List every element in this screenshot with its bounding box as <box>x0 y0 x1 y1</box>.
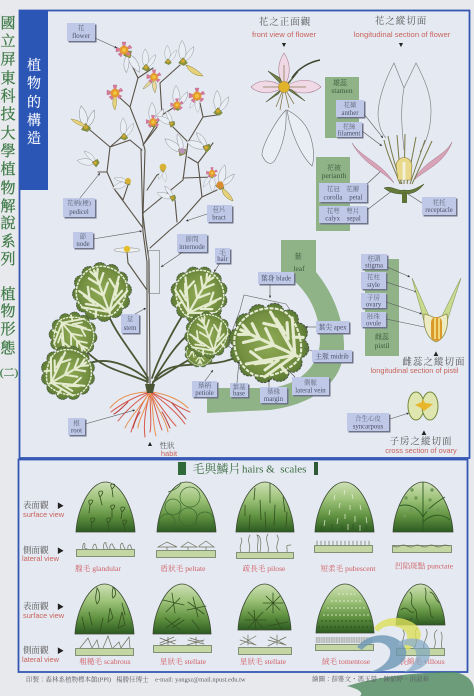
label: petiole <box>192 380 218 398</box>
side title: series name: 國 <box>0 15 16 32</box>
arrow: node <box>93 231 142 239</box>
label: base: 葉基 <box>232 382 246 391</box>
leaf background band <box>207 240 344 413</box>
side title: series name: 科 <box>0 88 16 105</box>
band heading: stamen: 雄蕊 <box>333 78 348 87</box>
arrow: margin <box>268 379 270 387</box>
heading: front view of flower: front view of flower <box>252 30 316 39</box>
title block: plant structure: 的 <box>27 95 41 111</box>
label: lateral vein <box>292 377 330 396</box>
heading: cross section of ovary <box>385 428 457 455</box>
side title: series name: 列 <box>0 251 16 268</box>
side title: series name: 大 <box>0 125 16 142</box>
label: syncarpous: syncarpous <box>353 424 384 430</box>
hair type: stellate <box>153 584 212 666</box>
band heading: stamen <box>331 78 353 95</box>
arrow: root <box>85 410 135 424</box>
title block: plant structure: 構 <box>27 112 41 129</box>
arrow: internode <box>161 252 183 267</box>
footer: print credit: 印製：森林系植物標本館(PPI) 楊勝任博士 e-mail: yangsz@mail.npust.edu.tw <box>26 674 246 684</box>
band heading: perianth: 花被 <box>327 163 341 172</box>
band heading: pistil: pistil <box>374 341 390 350</box>
hair type: villous: 長綿毛 villous <box>399 656 445 666</box>
row labels: surface and lateral views, row 2: lateral view <box>22 655 60 664</box>
label: anther: 花藥 <box>344 100 357 109</box>
band heading: leaf: leaf <box>293 264 305 273</box>
arrow: anther <box>364 114 383 138</box>
roots <box>110 392 190 437</box>
hair type: glandular <box>75 482 135 573</box>
label: root <box>68 418 86 436</box>
hair type: stellate: 星狀毛 stellate <box>160 656 207 666</box>
heading: habit: ▲ <box>147 441 153 448</box>
side title: series name: (二) <box>0 367 18 379</box>
label: filament <box>336 122 364 138</box>
label: internode: 節間 <box>186 234 199 243</box>
side title: series name: 東 <box>0 70 16 87</box>
label: lateral vein: lateral vein <box>295 388 326 394</box>
row labels: surface and lateral views, row 2: 側面觀 <box>23 645 49 655</box>
panel: plant structure <box>20 10 470 458</box>
line: lateral vein <box>286 368 295 377</box>
label: hair: hair <box>217 256 229 263</box>
label: node <box>73 232 94 250</box>
side title: series name: 植 <box>0 285 16 303</box>
hair type: pilose <box>236 482 294 573</box>
label: stigma: 柱頭 <box>368 254 381 262</box>
plant habit illustration <box>32 40 240 437</box>
arrow: stem <box>135 308 146 314</box>
label: stem: stem <box>124 325 137 332</box>
row labels: surface and lateral views, row 1: surface view <box>23 510 65 519</box>
label: pedicel: 花柄(梗) <box>67 198 91 207</box>
side title: series name: 態 <box>0 340 16 357</box>
label: filament: filament <box>338 130 360 138</box>
side title: series name: 解 <box>0 198 16 215</box>
label: hair <box>215 248 232 264</box>
row labels: surface and lateral views, row 2: ▶ <box>57 647 64 655</box>
label: corolla petal <box>319 183 368 204</box>
label: flower <box>67 23 96 42</box>
hair type: punctate <box>392 482 454 570</box>
arrow: hair <box>214 263 220 272</box>
label: apex: 葉尖 apex <box>318 322 347 332</box>
arrow: petal <box>367 170 382 184</box>
label: stem: 莖 <box>127 314 134 323</box>
label: base <box>230 382 250 398</box>
hair type: scabrous <box>75 584 134 666</box>
label: pedicel: pedicel <box>69 209 89 216</box>
panel: hairs and scales <box>18 460 468 672</box>
label: blade <box>258 272 296 286</box>
watermark logo <box>347 618 474 696</box>
heading: longitudinal section of flower: longitudinal section of flower <box>354 30 451 39</box>
heading: longitudinal section of flower: ▼ <box>398 42 404 49</box>
band heading: stamen: stamen <box>331 86 353 95</box>
label: anther <box>336 100 366 118</box>
row labels: surface and lateral views, row 1: lateral view <box>22 554 60 563</box>
side title: series name: 系 <box>0 233 16 250</box>
heading: front view of flower <box>252 16 316 49</box>
label: style: style <box>367 282 380 289</box>
arrow: syncarpous <box>390 413 409 419</box>
label: receptacle: 花托 <box>432 198 446 206</box>
heading: longitudinal section of flower: 花之縱切面 <box>375 15 427 27</box>
stamen background band <box>325 77 359 138</box>
label: filament: 花絲 <box>342 122 356 130</box>
label: bract: 苞片 <box>212 204 226 214</box>
arrow: stigma <box>387 267 410 277</box>
leaves <box>65 255 139 329</box>
side title: series name: 植 <box>0 160 16 178</box>
label: ovule: 胚珠 <box>367 312 380 320</box>
label: petiole: 葉柄 <box>198 380 212 390</box>
heading: front view of flower: 花之正面觀 <box>259 16 311 28</box>
label: style <box>361 272 388 290</box>
label: stigma: stigma <box>365 262 383 270</box>
illustration: longitudinal section of flower <box>352 63 452 203</box>
label: calyx sepal: calyx sepal <box>325 216 361 222</box>
side title: series name: 學 <box>0 143 16 160</box>
label: base: base <box>233 390 245 398</box>
title block: plant structure: 植 <box>27 57 41 74</box>
label: calyx sepal: 花萼 萼片 <box>327 206 359 215</box>
hair type: pubescent: 短柔毛 pubescent <box>320 563 376 573</box>
side title: series name: 屏 <box>0 51 16 68</box>
hair type: villous <box>396 584 445 666</box>
side title: series name: 說 <box>0 215 16 232</box>
petioles <box>85 310 240 385</box>
heading: hairs and scales <box>178 461 318 476</box>
hair type: scabrous: 粗糙毛 scabrous <box>79 656 131 666</box>
label: node: node <box>76 241 90 248</box>
arrow: blade <box>269 284 271 298</box>
label: stem <box>121 314 140 334</box>
row labels: surface and lateral views, row 1: 側面觀 <box>23 545 49 555</box>
hair type: stellate (dense): 星狀毛 stellate <box>240 656 287 666</box>
label: flower: 花 <box>78 23 85 32</box>
heading: front view of flower: ▼ <box>281 42 287 49</box>
title block: plant structure: 造 <box>27 130 41 147</box>
label: apex <box>316 321 350 334</box>
hair type: pubescent <box>314 482 376 573</box>
label: pedicel <box>63 198 96 218</box>
side title: series name: 物 <box>0 302 16 320</box>
arrow: pedicel <box>80 173 100 198</box>
label: ovary <box>361 292 388 310</box>
footer: illustrators: 繪圖：薛雅文・馮玉瑩・陳茹婷・洪淑華 <box>312 674 430 683</box>
heading: habit <box>147 440 178 458</box>
label: syncarpous: 合生心皮 <box>355 414 382 422</box>
label: internode <box>177 234 208 254</box>
heading: hairs and scales: 毛與鱗片 <box>192 461 241 476</box>
hair type: tomentose: 絨毛 tomentose <box>322 656 371 666</box>
row labels: surface and lateral views, row 2: ▶ <box>57 603 64 611</box>
side title: series name: 技 <box>0 106 16 123</box>
row labels: surface and lateral views, row 2 <box>22 601 65 664</box>
heading: longitudinal section of pistil: 雌蕊之縱切面 <box>402 356 466 368</box>
label: petiole: petiole <box>195 390 214 397</box>
heading: habit: 性狀 <box>160 440 175 450</box>
label: ovary: ovary <box>366 302 382 308</box>
band heading: perianth <box>322 163 347 180</box>
hair type: tomentose <box>316 584 374 666</box>
row labels: surface and lateral views, row 2: 表面觀 <box>23 601 49 611</box>
label: calyx sepal <box>319 206 368 224</box>
row labels: surface and lateral views, row 1 <box>22 500 65 563</box>
label: lateral vein: 側脈 <box>304 378 318 386</box>
band heading: pistil: 雌蕊 <box>375 332 390 341</box>
label: margin: 葉緣 <box>267 386 280 396</box>
perianth background band <box>316 157 350 231</box>
label: bract: bract <box>212 214 226 222</box>
label: hair: 毛 <box>219 248 226 256</box>
label: node: 節 <box>80 232 87 240</box>
arrow: petiole <box>205 370 213 381</box>
band heading: leaf <box>293 251 305 273</box>
label: internode: internode <box>179 244 205 251</box>
label: syncarpous <box>347 413 390 432</box>
band heading: perianth: perianth <box>322 171 347 180</box>
arrow: filament <box>362 131 382 146</box>
heading: longitudinal section of pistil: ▲ <box>432 349 440 358</box>
row labels: surface and lateral views, row 1: 表面觀 <box>23 500 49 510</box>
title block: plant structure <box>20 10 48 190</box>
hair type: pilose: 疏長毛 pilose <box>243 563 286 573</box>
blade outline and big leaf detail <box>217 291 321 395</box>
arrow: bract <box>186 214 207 221</box>
label: style: 花柱 <box>367 272 380 281</box>
label: bract <box>207 204 234 224</box>
side title: series name: 物 <box>0 179 16 197</box>
label: anther: anther <box>342 110 359 117</box>
arrow: sepal <box>367 190 393 210</box>
label: root: 根 <box>73 418 80 427</box>
internode bracket <box>148 250 160 294</box>
label: midrib <box>312 350 354 364</box>
arrow: apex <box>305 326 316 328</box>
hair type: glandular: 腺毛 glandular <box>75 563 121 573</box>
label: corolla petal: 花冠 花瓣 <box>327 184 360 193</box>
title block: plant structure: 物 <box>27 75 41 92</box>
heading: longitudinal section of pistil <box>371 349 466 375</box>
side title: series name: 立 <box>0 33 16 50</box>
band heading: leaf: 葉 <box>294 251 302 261</box>
label: receptacle: receptacle <box>425 207 453 214</box>
illustration: cross section of ovary <box>408 392 438 420</box>
label: corolla petal: corolla petal <box>324 194 363 202</box>
label: margin: margin <box>264 396 284 403</box>
stems <box>90 57 217 385</box>
label: stigma <box>361 254 388 270</box>
hair type: punctate: 凹陷斑點 punctate <box>395 560 454 570</box>
label: blade: 葉身 blade <box>261 274 291 282</box>
label: ovule <box>361 312 388 328</box>
illustration: longitudinal section of pistil <box>412 278 461 342</box>
flowers <box>71 40 236 252</box>
label: root: root <box>71 428 82 434</box>
hair type: peltate: 盾狀毛 peltate <box>161 563 206 573</box>
arrow: ovule <box>386 319 429 328</box>
row labels: surface and lateral views, row 1: ▶ <box>57 502 64 510</box>
heading: longitudinal section of flower <box>354 15 451 49</box>
line: receptacle <box>408 194 422 203</box>
side title: series name <box>0 15 18 379</box>
hair type: peltate <box>156 482 216 573</box>
arrow: base <box>237 361 239 383</box>
heading: cross section of ovary: cross section of ovary <box>385 446 457 455</box>
row labels: surface and lateral views, row 1: ▶ <box>57 547 64 555</box>
row labels: surface and lateral views, row 2: surface view <box>23 611 65 620</box>
label: ovary: 子房 <box>367 292 380 302</box>
label: ovule: ovule <box>366 320 381 328</box>
pistil background band <box>365 259 399 356</box>
label: margin <box>260 386 288 404</box>
band heading: pistil <box>374 332 390 350</box>
heading: cross section of ovary: 子房之縱切面 <box>389 436 453 448</box>
heading: cross section of ovary: ▲ <box>420 428 428 437</box>
label: flower: flower <box>72 33 91 40</box>
side title: series name: 形 <box>0 321 16 338</box>
heading: habit: habit <box>161 449 178 458</box>
heading: longitudinal section of pistil: longitudinal section of pistil <box>371 366 459 375</box>
arrow: style <box>386 282 417 292</box>
hair type: stellate (dense) <box>238 584 292 666</box>
arrow: flower <box>95 38 117 48</box>
arrow: ovary <box>386 302 422 314</box>
heading: hairs and scales: hairs & scales <box>242 464 306 476</box>
line: midrib <box>304 348 312 351</box>
illustration: front view of flower <box>251 53 321 166</box>
label: midrib: 主脈 midrib <box>315 352 349 360</box>
label: receptacle <box>422 197 458 216</box>
